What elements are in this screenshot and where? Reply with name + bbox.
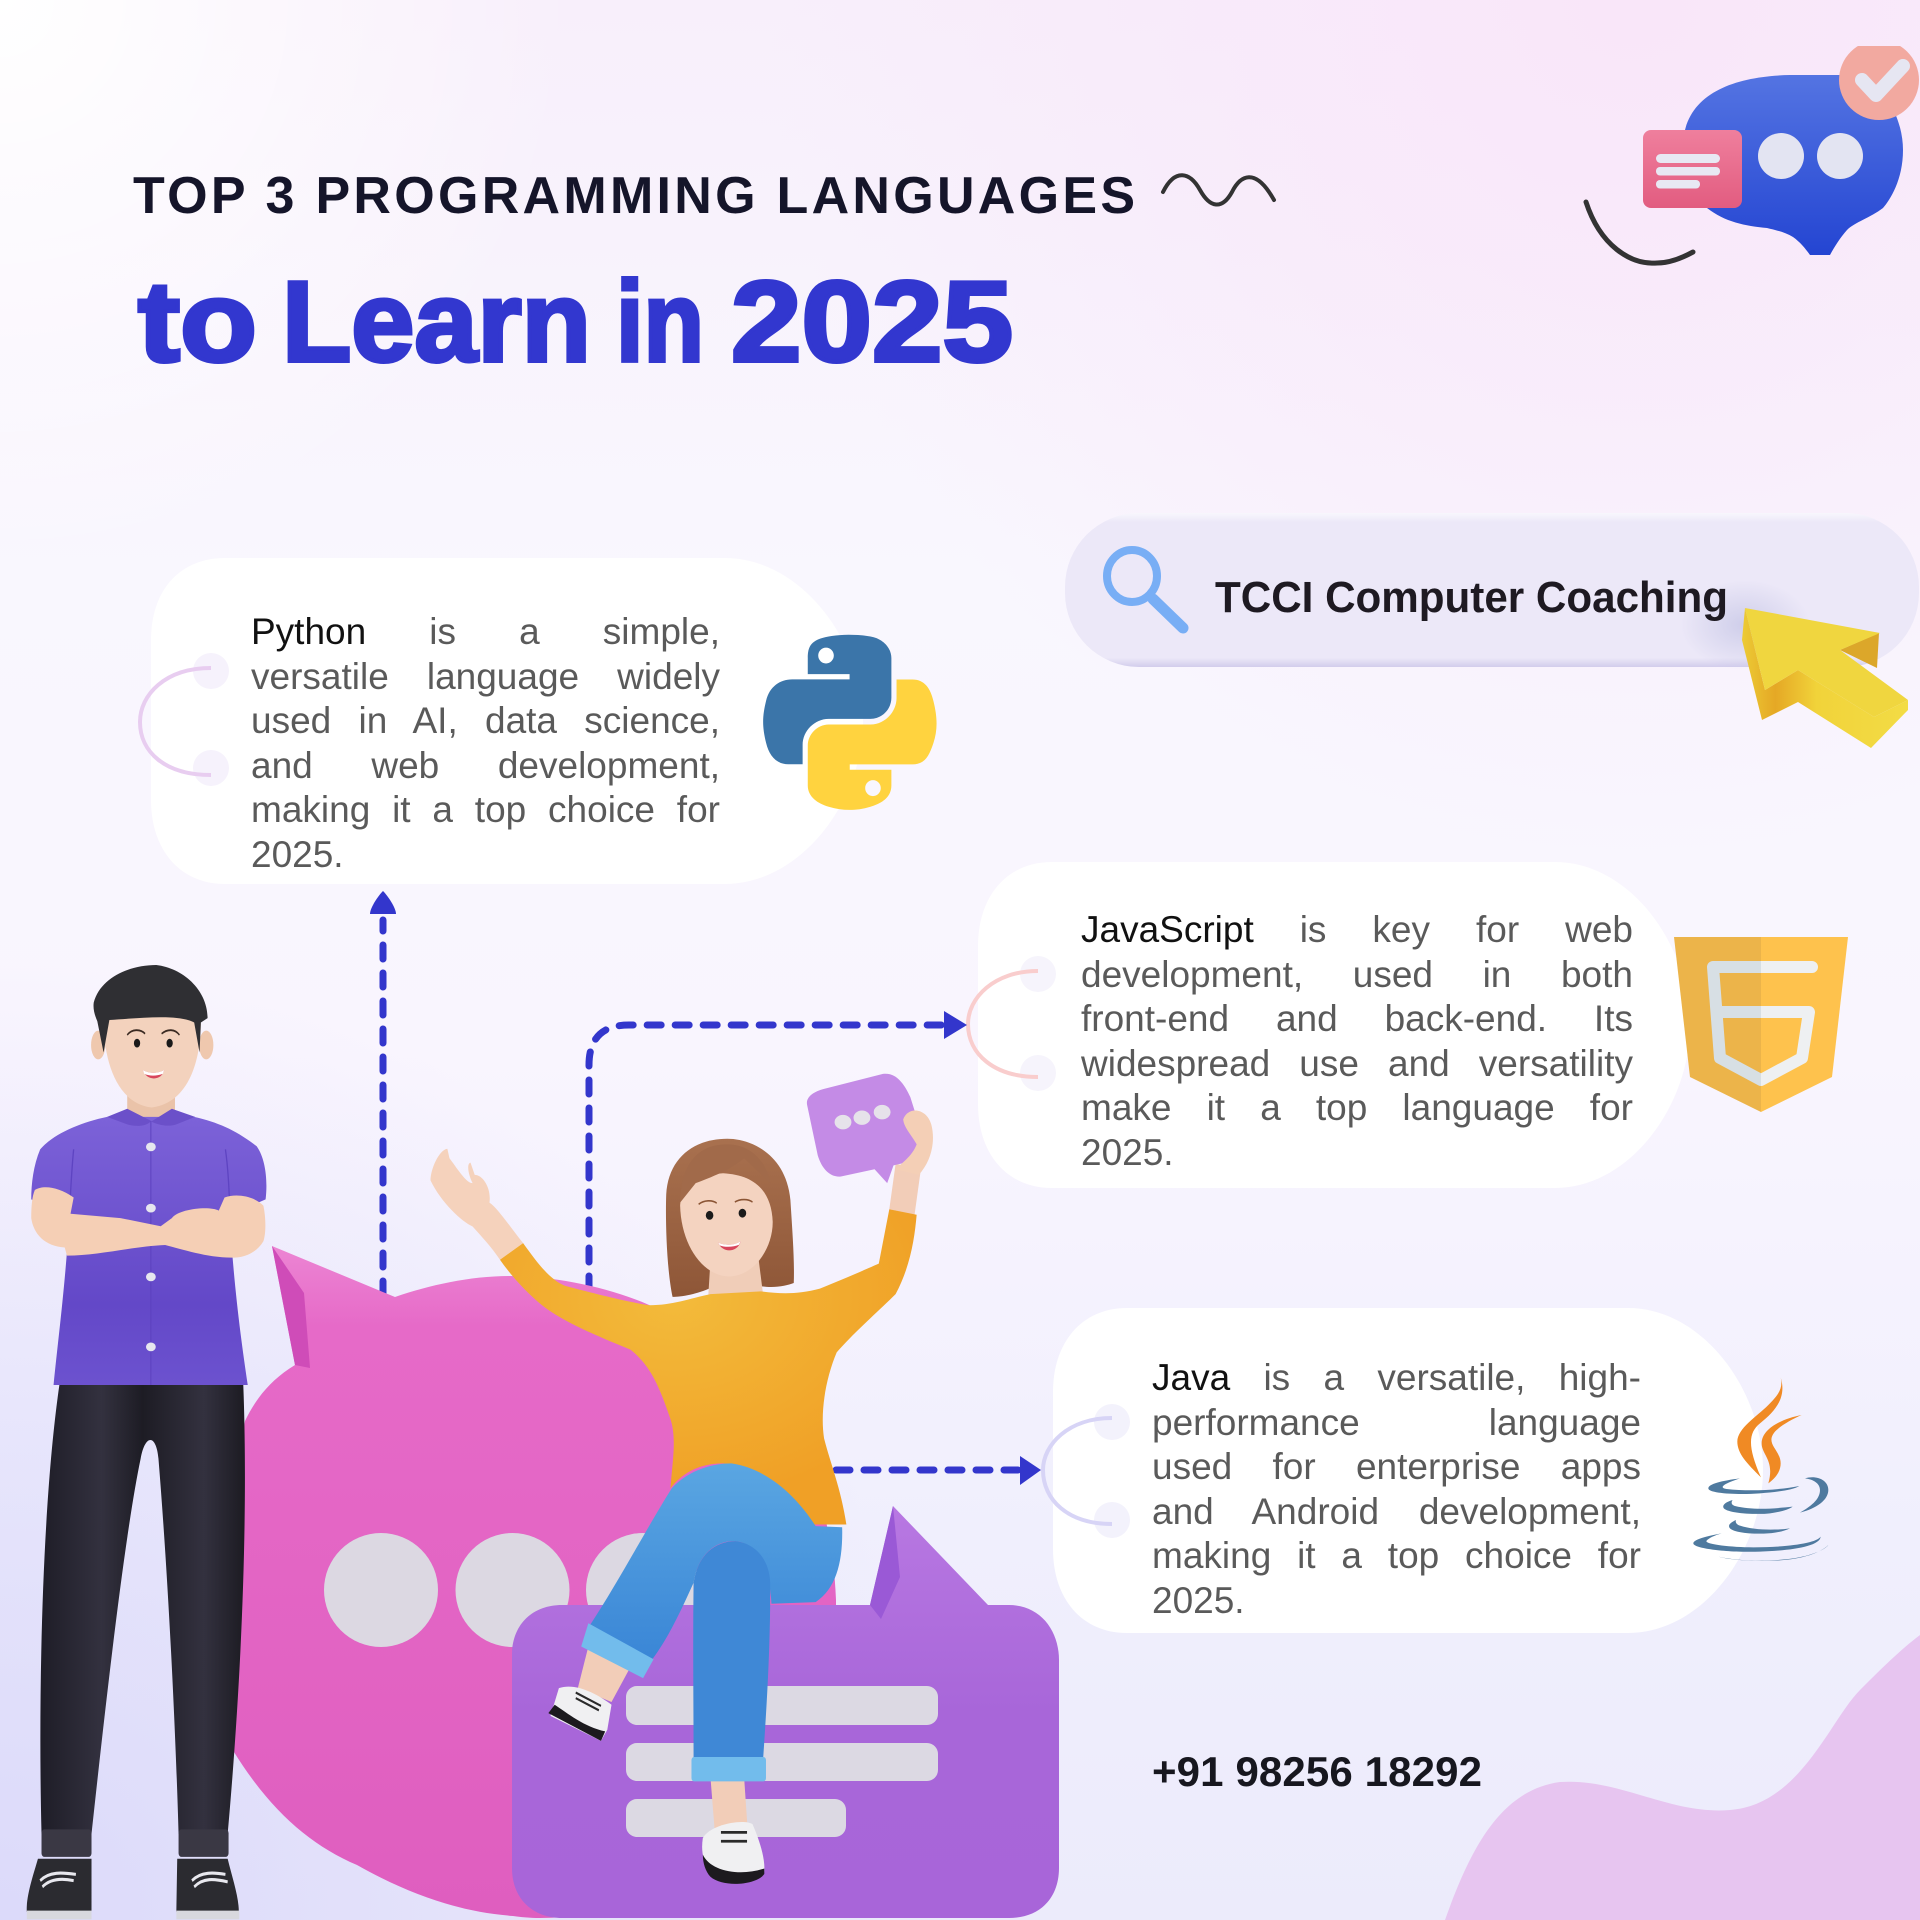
text block: JavaScript description: JavaScript is key for web [1081,909,1633,950]
text block: JavaScript description: make it a top language for [1081,1087,1633,1128]
title line two [138,259,1013,386]
search bar [1065,513,1919,670]
title line two: 2025 [731,259,1013,386]
text block: JavaScript description [1081,909,1633,1172]
text block: Python description: Python is a simple, [251,611,720,652]
title line two: in [616,259,704,386]
panel: Python card [140,558,937,884]
title line two: Learn [282,259,591,386]
arrow: up to Python [370,891,396,1295]
text block: Java description: Java is a versatile, high- [1152,1357,1641,1398]
text block: Python description [251,611,720,874]
icon: chat bubble with check [1586,40,1919,263]
phone number: +91 98256 18292 [1152,1748,1482,1795]
arrow: to Java [836,1456,1041,1485]
arrow: to JavaScript [589,1011,967,1290]
icon: magnifier [1107,550,1183,628]
text block: Java description: and Android development, [1152,1490,1641,1532]
panel: Java card [1043,1308,1828,1633]
text block: Python description: 2025. [251,834,344,874]
text block: Python description: making it a top choice for [251,789,720,830]
woman figure [431,1074,933,1884]
text block: Java description: 2025. [1152,1580,1245,1620]
purple message bubble [512,1506,1059,1918]
big pink chat bubble [227,1246,836,1918]
text block: Python description: used in AI, data science, [251,700,720,741]
icon: JS shield [1674,937,1848,1112]
man figure [27,965,266,1919]
bottom-right wave [1445,1635,1920,1920]
text block: JavaScript description: widespread use and versatility [1081,1042,1633,1084]
text block: Python description: versatile language widely [251,656,720,696]
text block: Python description: and web development, [251,744,720,786]
icon: yellow cursor arrow [1742,608,1908,748]
text block: Java description: performance language [1152,1402,1641,1442]
title line one: TOP 3 PROGRAMMING LANGUAGES [133,167,1135,225]
icon: Java logo [1693,1377,1828,1561]
search bar label: TCCI Computer Coaching [1215,573,1728,622]
text block: JavaScript description: front-end and back-end. Its [1081,998,1633,1039]
text block: Java description: making it a top choice for [1152,1535,1641,1576]
squiggle [1163,175,1274,205]
text block: JavaScript description: 2025. [1081,1132,1174,1172]
panel: JavaScript card [968,862,1848,1188]
text block: Java description [1152,1357,1641,1620]
text block: Java description: used for enterprise apps [1152,1446,1641,1487]
icon: Python logo [763,635,937,810]
text block: JavaScript description: development, used in both [1081,954,1633,994]
title line two: to [138,259,257,386]
